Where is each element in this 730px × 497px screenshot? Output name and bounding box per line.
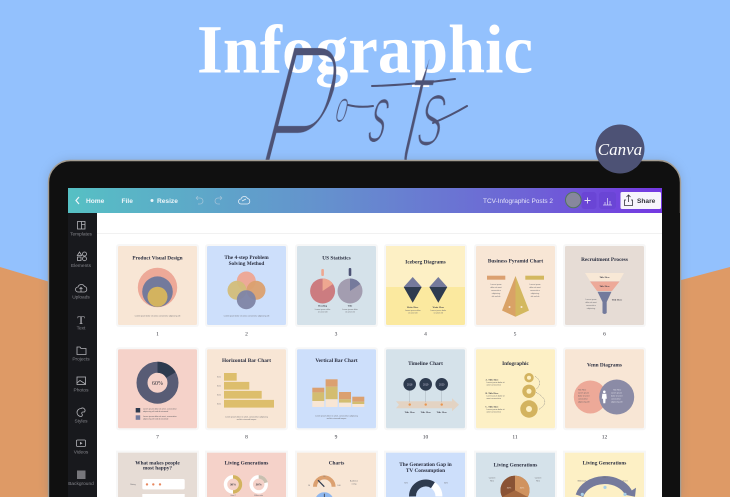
template grid [116, 244, 646, 497]
card 6: Recruitment Process: Title Here [612, 298, 622, 302]
card 10: Timeline Chart: 2018 [407, 383, 413, 386]
card 2: 4-step Problem Solving Method: Solving Method [229, 261, 264, 267]
card 4: Iceberg Diagrams: Write Here [407, 306, 418, 309]
card 16: Generation Gap in TV Consumption [384, 451, 467, 497]
card 18: Living Generations cycle: Living Generations [583, 461, 626, 467]
sidebar [68, 222, 94, 487]
card 8: Horizontal Bar Chart: Item [217, 375, 221, 378]
card 6: Recruitment Process: consectetur [586, 304, 596, 307]
card 6: Recruitment Process [563, 244, 646, 327]
card 3: US Statistics: Lorem ipsum dolor [342, 308, 358, 311]
card 13: What makes people most happy: most happy? [143, 466, 172, 472]
badge: Canva [596, 124, 644, 174]
card 17: Living Generations pie: Here [490, 480, 494, 483]
card 17: Living Generations pie: Here [536, 480, 540, 483]
card 11: Infographic: Lorem ipsum dolor sit [486, 408, 505, 411]
card 14: Living Generations donuts [205, 451, 288, 497]
label: Home: Home [86, 198, 105, 205]
label: Uploads: Uploads [72, 294, 90, 300]
card 11: Infographic: B. Title Here [485, 392, 499, 395]
card 1: Product Visual Design: Product Visual Design [132, 256, 183, 262]
card 11: Infographic: Lorem ipsum dolor sit [486, 394, 505, 397]
card 10: Timeline Chart: Title Here [437, 411, 447, 414]
card 10: Timeline Chart: Timeline Chart [408, 361, 443, 367]
label: Videos: Videos [74, 450, 89, 456]
card 11: Infographic: Infographic [502, 361, 530, 367]
badge: Canva: Canva [598, 140, 642, 159]
card 8: Horizontal Bar Chart: Item [217, 384, 221, 387]
label: Background: Background [68, 481, 94, 487]
card 16: Generation Gap in TV Consumption: 30% [444, 483, 448, 485]
card 17: Living Generations pie: Content [489, 477, 496, 480]
card 3: US Statistics: Heading [318, 304, 328, 308]
card 4: Iceberg Diagrams: sit amet elit [434, 312, 444, 314]
title: Infographic: Infographic [197, 12, 533, 88]
card 14: Living Generations donuts: Living Generations [225, 461, 268, 467]
card 15: Charts gauge: 100 [337, 485, 341, 487]
card 3: US Statistics: sit amet elit [345, 310, 355, 314]
card 9: Vertical Bar Chart: Lorem ipsum dolor sit amet, consectetur adipiscing [315, 414, 358, 417]
card 9: Vertical Bar Chart: sed do eiusmod tempor [327, 417, 347, 420]
card 15: Charts gauge: Audience [350, 480, 358, 483]
avatar [566, 192, 581, 208]
card 8: Horizontal Bar Chart: Item [217, 402, 221, 405]
laptop body [48, 160, 680, 497]
card 2: 4-step Problem Solving Method [205, 244, 288, 327]
card 11: Infographic [474, 347, 557, 430]
card 3: US Statistics [295, 244, 378, 327]
card 12: Venn Diagrams: consectetur [611, 397, 621, 400]
card 6: Recruitment Process: Lorem ipsum [586, 298, 597, 301]
card 14: Living Generations donuts: 30% [256, 483, 262, 487]
card 9: Vertical Bar Chart [295, 347, 378, 430]
card 5: Business Pyramid Chart: Business Pyramid Chart [488, 258, 543, 264]
card 1: Product Visual Design [116, 244, 199, 327]
card 6: Recruitment Process: Title Here [599, 276, 610, 279]
card 10: Timeline Chart: 2019 [423, 383, 429, 386]
card 13: What makes people most happy: What makes people [135, 461, 180, 467]
icon: redo [215, 196, 222, 204]
label: Styles: Styles [74, 418, 88, 424]
icon: background pattern [77, 470, 86, 479]
card 8: Horizontal Bar Chart: Lorem ipsum dolor sit amet, consectetur adipiscing [225, 415, 268, 418]
card 11: Infographic: amet consectetur [486, 383, 501, 386]
icon: uploads [76, 285, 87, 292]
card 15: Charts gauge: rating [352, 483, 356, 486]
number 2: 2 [245, 332, 248, 338]
title: Posts script: t [381, 10, 455, 211]
number 9: 9 [335, 434, 338, 440]
icon: elements [77, 252, 86, 261]
canvas area [97, 213, 662, 497]
card 3: US Statistics: Lorem ipsum dolor [315, 308, 331, 311]
card 10: Timeline Chart: 2020 [439, 383, 445, 386]
card 4: Iceberg Diagrams: Lorem ipsum dolor [430, 309, 446, 312]
card 6: Recruitment Process: Title Here [599, 285, 610, 288]
card 2: 4-step Problem Solving Method: The 4-step Problem [224, 255, 269, 261]
card 7: donut chart 60%: Lorem ipsum dolor sit amet, consectetur [143, 415, 177, 418]
title: Posts script [231, 0, 467, 247]
card 6: Recruitment Process: dolor sit amet [585, 301, 597, 304]
title: Posts script: P [231, 0, 367, 247]
card 4: Iceberg Diagrams: Lorem ipsum dolor [405, 309, 421, 312]
background: orange right hill [670, 267, 730, 497]
icon: undo [196, 196, 203, 204]
card 12: Venn Diagrams: Title Here [578, 388, 586, 391]
label: Projects: Projects [72, 356, 90, 362]
card 5: Business Pyramid Chart: elit sed do [492, 295, 500, 298]
card 6: Recruitment Process: Recruitment Process [581, 257, 628, 263]
title: Posts script: o [331, 82, 355, 132]
card 11: Infographic: amet consectetur [486, 410, 501, 413]
number 11: 11 [512, 434, 518, 440]
card 11: Infographic: amet consectetur [486, 397, 501, 400]
icon: projects folder [77, 347, 86, 354]
laptop right bezel [662, 213, 680, 497]
card 3: US Statistics: US Statistics [322, 256, 351, 262]
card 15: Charts gauge: 10 [308, 485, 310, 487]
label: Text: Text [77, 326, 86, 332]
number 12: 12 [602, 434, 608, 440]
card 16: Generation Gap in TV Consumption: The Generation Gap in [399, 462, 452, 468]
label: Resize: Resize [157, 198, 178, 205]
card 4: Iceberg Diagrams: sit amet elit [408, 312, 418, 314]
card 7: donut chart 60%: adipiscing elit sed do eiusmod [143, 417, 168, 420]
card 12: Venn Diagrams: Lorem ipsum [611, 391, 622, 394]
icon: cloud saved [238, 197, 250, 204]
card 12: Venn Diagrams: Title Here [613, 388, 621, 391]
button: share: Share [637, 198, 656, 205]
icon: templates [78, 222, 85, 229]
card 12: Venn Diagrams: consectetur [578, 397, 588, 400]
card 10: Timeline Chart: Title Here [405, 411, 415, 414]
card 13: What makes people most happy [116, 451, 199, 497]
sidebar background [68, 213, 97, 497]
card 17: Living Generations pie: Living Generations [494, 463, 537, 469]
card 12: Venn Diagrams [563, 347, 646, 430]
card 7: donut chart 60%: Lorem ipsum dolor sit amet, consectetur [143, 407, 177, 410]
card 6: Recruitment Process: adipiscing [587, 308, 595, 310]
card 17: Living Generations pie [474, 451, 557, 497]
card 5: Business Pyramid Chart: Lorem ipsum [530, 283, 541, 286]
card 8: Horizontal Bar Chart: Item [217, 393, 221, 396]
card 18: Living Generations cycle: Gen X [622, 481, 628, 483]
card 7: donut chart 60%: 60% [152, 381, 163, 387]
card 14: Living Generations donuts: 30% [230, 483, 236, 487]
number 3: 3 [335, 332, 338, 338]
card 5: Business Pyramid Chart: elit sed do [531, 295, 539, 298]
card 18: Living Generations cycle: Gen Z [602, 477, 608, 479]
card 5: Business Pyramid Chart: adipiscing [492, 293, 500, 295]
card 7: donut chart 60%: adipiscing elit sed do eiusmod [143, 410, 168, 413]
card 5: Business Pyramid Chart: consectetur [491, 289, 501, 292]
icon: photos [77, 377, 86, 384]
card 5: Business Pyramid Chart: dolor sit amet [490, 286, 502, 289]
card 5: Business Pyramid Chart: consectetur [530, 289, 540, 292]
card 12: Venn Diagrams: Lorem ipsum [578, 391, 589, 394]
card 10: Timeline Chart: Title Here [421, 411, 431, 414]
card 10: Timeline Chart [384, 347, 467, 430]
card 16: Generation Gap in TV Consumption: 70% [404, 483, 408, 485]
icon: styles palette [77, 408, 85, 416]
icon: text tool: T [77, 313, 85, 327]
label: document name: TCV-Infographic Posts 2 [483, 198, 553, 205]
card 9: Vertical Bar Chart: Vertical Bar Chart [315, 358, 358, 364]
card 17: Living Generations pie: Content [535, 477, 542, 480]
card 12: Venn Diagrams: dolor sit amet [578, 394, 590, 397]
card 4: Iceberg Diagrams: Iceberg Diagrams [405, 260, 446, 266]
number 4: 4 [424, 332, 427, 338]
header divider [97, 233, 662, 234]
card 12: Venn Diagrams: Venn Diagrams [587, 362, 622, 368]
title: Posts script: s [361, 68, 401, 160]
number 5: 5 [514, 332, 517, 338]
top bar [68, 188, 662, 213]
card 11: Infographic: Lorem ipsum dolor sit [486, 381, 505, 384]
card 12: Venn Diagrams: adipiscing elit [578, 400, 590, 403]
background: orange left hill [0, 267, 60, 497]
label: Templates: Templates [70, 232, 93, 238]
icon: crown [150, 199, 154, 202]
label: Photos: Photos [74, 388, 89, 394]
card 11: Infographic: A. Title Here [485, 378, 499, 381]
card 13: What makes people most happy: Rating [130, 483, 136, 486]
card 1: Product Visual Design: Lorem ipsum dolor sit amet, consectetur adipiscing elit [135, 314, 181, 318]
card 18: Living Generations cycle [563, 451, 646, 497]
card 17: Living Generations pie: 30% [520, 488, 524, 490]
number 1: 1 [156, 332, 159, 338]
card 12: Venn Diagrams: dolor sit amet [611, 394, 623, 397]
title: Posts script: s [408, 58, 461, 167]
card 5: Business Pyramid Chart: Lorem ipsum [491, 283, 502, 286]
card 5: Business Pyramid Chart: adipiscing [531, 293, 539, 295]
icon: videos [76, 440, 86, 446]
number 6: 6 [603, 332, 606, 338]
card 8: Horizontal Bar Chart: sed do eiusmod tempor [237, 418, 257, 421]
card 8: Horizontal Bar Chart: Horizontal Bar Chart [222, 358, 271, 364]
label: File: File [122, 198, 133, 205]
card 7: donut chart 60% [116, 347, 199, 430]
card 15: Charts gauge: Charts [329, 461, 344, 467]
number 8: 8 [245, 434, 248, 440]
number 7: 7 [156, 434, 159, 440]
card 4: Iceberg Diagrams [384, 244, 467, 327]
card 15: Charts gauge: 50 [323, 476, 325, 478]
card 5: Business Pyramid Chart: dolor sit amet [529, 286, 541, 289]
label: Elements: Elements [71, 263, 92, 269]
card 17: Living Generations pie: 30% [507, 488, 511, 490]
card 3: US Statistics: sit amet elit [318, 310, 328, 314]
card 4: Iceberg Diagrams: Write Here [433, 306, 444, 309]
card 12: Venn Diagrams: adipiscing elit [611, 400, 623, 403]
number 10: 10 [423, 434, 428, 440]
button: share [620, 192, 661, 209]
button: add [582, 192, 596, 209]
card 3: US Statistics: Title [348, 304, 352, 308]
card 15: Charts gauge [295, 451, 378, 497]
card 16: Generation Gap in TV Consumption: TV Consumption [406, 468, 445, 474]
card 11: Infographic: C. Title Here [485, 405, 499, 408]
laptop shadow [48, 160, 681, 497]
card 5: Business Pyramid Chart [474, 244, 557, 327]
card 8: Horizontal Bar Chart [205, 347, 288, 430]
card 2: 4-step Problem Solving Method: Lorem ipsum dolor sit amet, consectetur adipiscing elit [224, 314, 270, 318]
button: insights [599, 192, 616, 209]
card 18: Living Generations cycle: Millennials [578, 481, 586, 483]
icon: back chevron [76, 197, 79, 204]
